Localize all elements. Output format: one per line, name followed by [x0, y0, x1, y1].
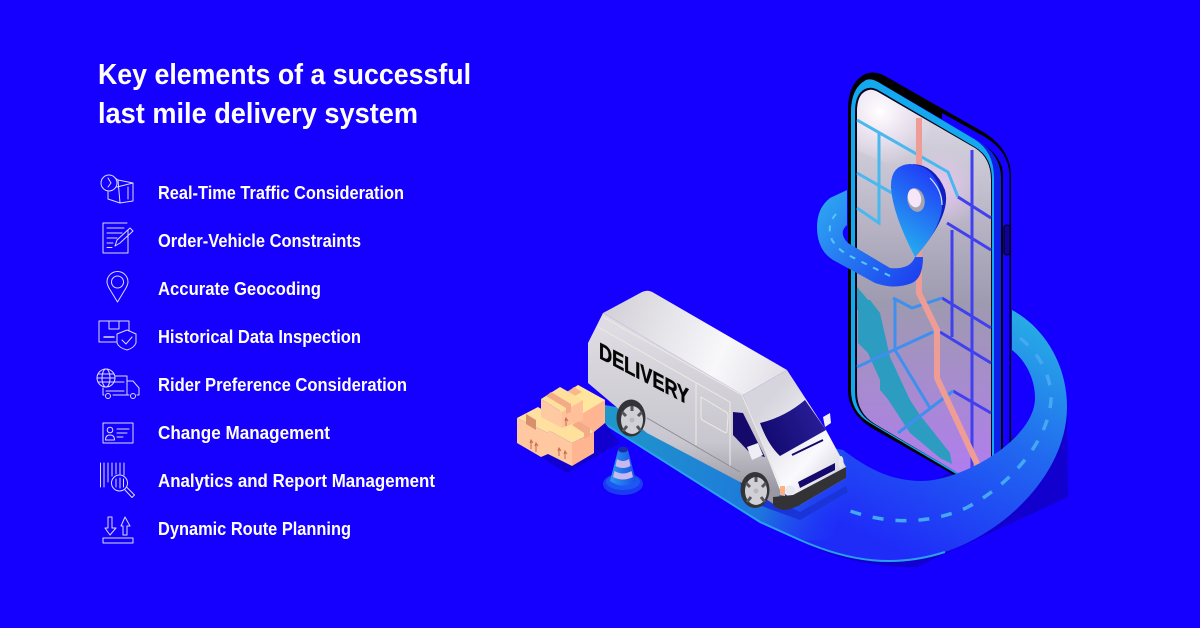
icon: globe and truck	[97, 369, 139, 398]
item: order-vehicle constraints	[103, 223, 361, 253]
side window	[733, 412, 765, 457]
item: dynamic route planning: Dynamic Route Planning	[158, 519, 351, 539]
icon: box and shield	[99, 321, 136, 350]
location pin	[891, 164, 946, 257]
icon: barcode with magnifier	[100, 463, 134, 498]
delivery van	[588, 291, 848, 520]
box arrows	[530, 418, 568, 459]
screen map	[857, 90, 991, 476]
main route	[919, 118, 980, 470]
item: analytics	[100, 463, 435, 498]
street lines mid	[857, 298, 953, 433]
item: accurate geocoding: Accurate Geocoding	[158, 279, 321, 299]
phone body	[848, 72, 1011, 480]
item: real-time traffic: Real-Time Traffic Consideration	[158, 183, 404, 203]
item: rider preference: Rider Preference Consideration	[158, 375, 407, 395]
cardboard boxes	[517, 385, 620, 473]
phone button	[1004, 225, 1010, 255]
wing mirrors	[747, 443, 763, 460]
icon: clock and box	[101, 175, 133, 203]
windshield	[760, 400, 826, 456]
item: historical data: Historical Data Inspection	[158, 327, 361, 347]
street lines dark	[940, 150, 991, 470]
van side	[588, 313, 782, 505]
rear wheel	[616, 400, 646, 436]
hood slot	[792, 440, 823, 455]
icon: document and pencil	[103, 223, 133, 253]
item: analytics: Analytics and Report Management	[158, 471, 435, 491]
title: Key elements of a successful	[98, 59, 471, 91]
list of key elements	[97, 175, 435, 543]
left box	[517, 418, 548, 457]
road dashes	[840, 338, 1051, 521]
icon: map pin	[107, 272, 128, 302]
item: change management: Change Management	[158, 423, 330, 443]
van shadow	[740, 482, 848, 520]
traffic cone	[603, 446, 643, 495]
front wheel	[740, 472, 770, 508]
title: last mile delivery system	[98, 98, 418, 130]
phone	[848, 72, 1011, 480]
icon: id card	[103, 423, 133, 443]
loop road around pin	[817, 190, 923, 286]
front box	[548, 430, 572, 466]
item: dynamic route planning	[103, 517, 351, 543]
road shadow	[810, 407, 1068, 567]
headlights	[780, 486, 785, 496]
van front	[743, 370, 846, 505]
item: historical data	[99, 321, 361, 350]
illustration: last mile delivery	[517, 72, 1068, 567]
van body lines	[598, 317, 780, 485]
main road	[605, 310, 1067, 561]
item: accurate geocoding	[107, 272, 321, 302]
item: real-time traffic	[101, 175, 404, 203]
bumper	[773, 467, 846, 510]
top box	[541, 399, 562, 428]
street lines light	[857, 120, 958, 223]
item: order-vehicle constraints: Order-Vehicle Constraints	[158, 231, 361, 251]
grille	[798, 463, 835, 488]
van lettering: DELIVERY	[599, 338, 689, 411]
river	[857, 287, 952, 464]
title	[98, 59, 471, 130]
van roof	[603, 291, 787, 395]
icon: arrows and tray	[103, 517, 133, 543]
item: rider preference	[97, 369, 407, 398]
back box	[560, 385, 605, 432]
